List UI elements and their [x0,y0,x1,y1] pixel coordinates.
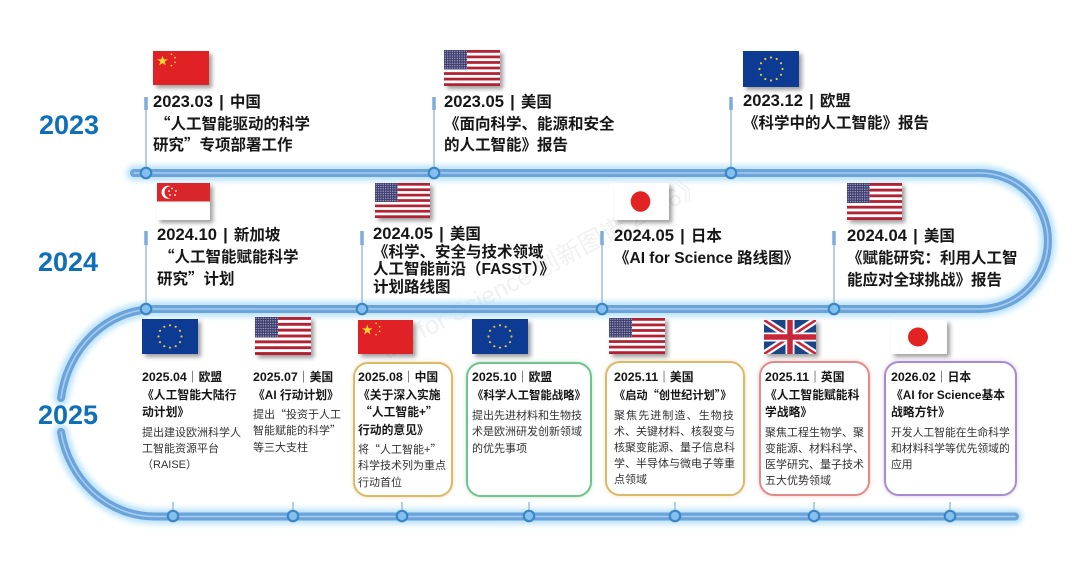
card 2025.11 UK: 学战略》 [765,405,812,419]
milestone 2024.10 Singapore: “人工智能赋能科学 [159,245,299,267]
milestone 2024.05 USA [373,224,555,296]
card 2026.02 Japan: 和材料科学等优先领域的 [891,442,1010,454]
card 2025.10 EU [466,362,592,497]
card 2026.02 Japan: 应用 [891,458,913,470]
card 2025.11 USA: 《启动“创世纪计划”》 [614,386,732,402]
card 2025.11 USA: 学、半导体与微电子等重 [614,458,735,470]
milestone 2023.03 China: 研究”专项部署工作 [153,133,293,155]
timeline nodes [141,168,955,521]
card 2025.08 China: 将“人工智能+” [358,441,441,457]
card 2025.08 China: 行动的意见》 [358,422,429,436]
milestone 2023.03 China [153,92,310,155]
milestone 2024.04 USA [847,226,1018,289]
card 2025.11 UK: 五大优势领域 [765,474,831,486]
milestone 2024.04 USA: 《赋能研究：利用人工智 [847,250,1018,267]
card 2025.08 China: “人工智能+” [360,403,438,420]
milestone 2024.05 USA: 人工智能前沿（FASST）》 [373,261,555,278]
milestone 2025.07 USA [253,370,341,454]
card 2025.11 UK: 聚焦工程生物学、聚 [765,426,864,438]
milestone 2023.12 EU: 2023.12 | 欧盟 [743,91,851,110]
milestone 2023.03 China: “人工智能驱动的科学 [155,112,310,134]
card 2025.10 EU: 提出先进材料和生物技 [472,410,582,422]
country flags [142,50,947,355]
milestone 2024.05 USA: 计划路线图 [373,279,451,296]
milestone 2025.07 USA: 提出“投资于人工 [253,406,341,422]
card 2025.11 UK: 《人工智能赋能科 [765,388,859,402]
card 2025.08 China: 科学技术列为重点 [358,460,446,472]
card 2026.02 Japan: 开发人工智能在生命科学 [891,426,1010,438]
milestone 2023.12 EU: 《科学中的人工智能》报告 [743,114,929,132]
milestone 2024.10 Singapore [157,225,299,289]
milestone 2024.05 USA: 2024.05 | 美国 [373,224,481,243]
milestone 2025.07 USA: 《AI 行动计划》 [253,388,339,402]
milestone 2023.05 USA: 《面向科学、能源和安全 [444,116,615,132]
milestone 2024.05 Japan [614,226,799,267]
milestone 2025.07 USA: 等三大支柱 [253,442,308,454]
card 2026.02 Japan [884,361,1017,496]
year label 2023: 2023 [39,110,99,140]
milestone 2024.05 USA: 《科学、安全与技术领域 [373,244,544,261]
card 2025.11 UK: 医学研究、量子技术 [765,458,864,470]
milestone 2025.04 EU: 动计划》 [142,405,189,419]
milestone 2025.04 EU: 《人工智能大陆行 [142,388,236,402]
card 2026.02 Japan: 2026.02｜日本 [891,370,971,384]
card 2025.08 China [353,362,453,497]
milestone 2024.04 USA: 能应对全球挑战》报告 [847,272,1002,289]
milestone 2025.04 EU: 提出建设欧洲科学人 [142,426,241,438]
stem top accents [146,97,834,245]
year label 2024: 2024 [38,247,98,277]
card 2025.11 USA: 2025.11｜美国 [614,370,694,384]
milestone 2024.10 Singapore: 研究”计划 [157,267,235,289]
card 2026.02 Japan: 《AI for Science基本 [891,388,1005,402]
card 2025.11 UK: 变能源、材料科学、 [765,442,864,454]
card 2025.11 USA: 聚焦先进制造、生物技 [614,410,735,422]
milestone 2025.07 USA: 2025.07｜美国 [253,370,333,384]
card 2025.10 EU: 的优先事项 [472,443,527,455]
card 2025.11 USA: 点领域 [614,474,647,486]
milestone 2025.04 EU [142,368,590,491]
card 2025.08 China: 2025.08｜中国 [358,370,438,384]
milestone 2025.07 USA: 智能赋能的科学” [253,422,341,438]
milestone 2025.04 EU: （RAISE） [142,459,197,471]
card 2025.11 USA: 核聚变能源、量子信息科 [614,442,735,454]
card 2025.08 China: 《关于深入实施 [358,388,441,402]
milestone 2023.03 China: 2023.03 | 中国 [153,92,261,111]
milestone 2023.05 USA: 的人工智能》报告 [444,137,568,154]
card 2025.10 EU: 《科学人工智能战略》 [472,390,586,402]
track glow [61,173,1048,517]
milestone 2024.10 Singapore: 2024.10 | 新加坡 [157,225,280,244]
timeline track [61,173,1048,517]
card 2025.11 USA [605,361,745,496]
milestone 2024.05 Japan: 2024.05 | 日本 [614,226,722,245]
milestone 2025.04 EU: 2025.04｜欧盟 [142,370,222,384]
milestone 2023.12 EU [743,91,929,132]
milestone 2024.05 Japan: 《AI for Science 路线图》 [614,250,799,267]
card 2025.11 UK: 2025.11｜英国 [765,370,845,384]
card 2025.11 USA: 术、关键材料、核裂变与 [614,426,735,438]
year label 2025: 2025 [38,400,98,430]
connector stems [146,97,950,516]
card 2026.02 Japan: 战略方针》 [891,405,950,419]
milestone 2025.04 EU: 工智能资源平台 [142,443,219,455]
milestone 2023.05 USA: 2023.05 | 美国 [444,92,552,111]
card 2025.10 EU: 2025.10｜欧盟 [472,370,552,384]
card 2025.11 UK [759,361,870,496]
watermark: 《AI for Science 创新图谱 2026》 [363,171,709,370]
card 2025.08 China: 行动首位 [358,477,402,489]
milestone 2024.04 USA: 2024.04 | 美国 [847,226,955,245]
card 2025.10 EU: 术是欧洲研发创新领域 [472,426,582,438]
milestone 2023.05 USA [444,92,615,154]
